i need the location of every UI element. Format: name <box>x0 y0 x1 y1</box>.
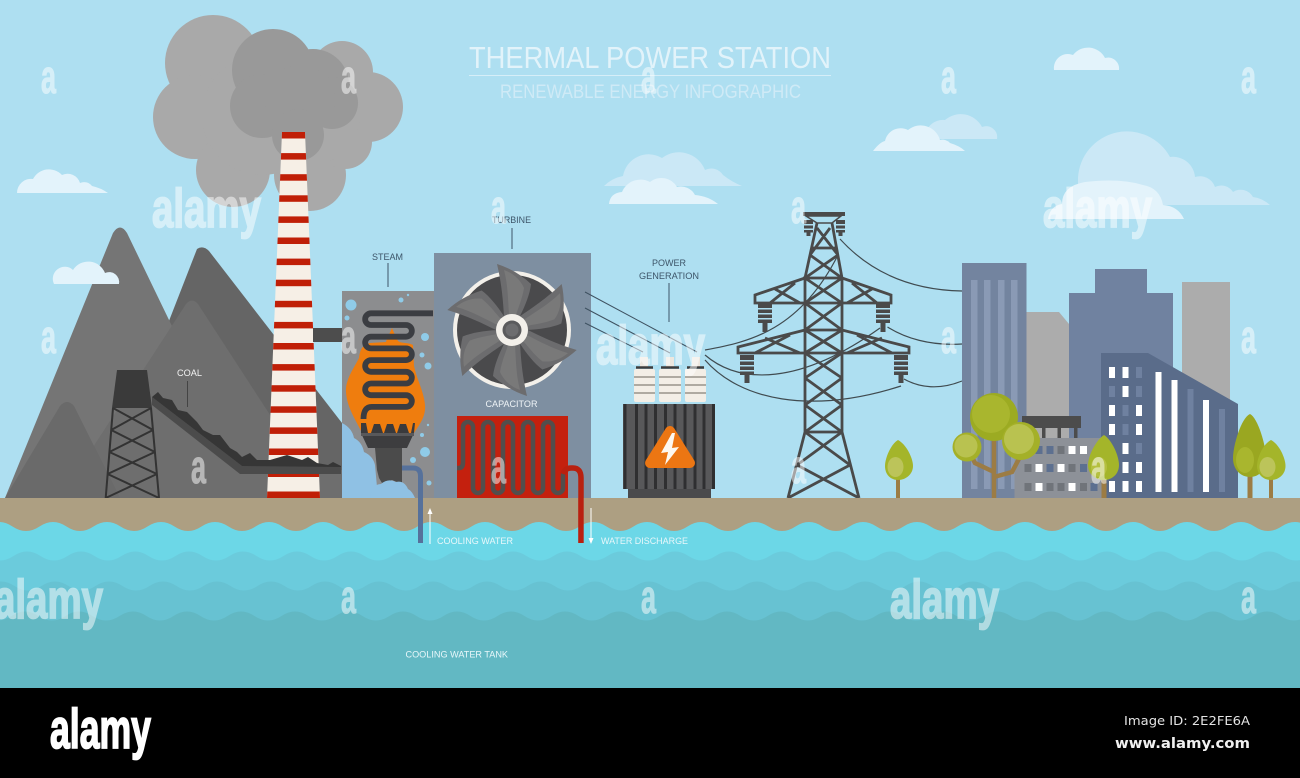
pylon <box>738 212 909 498</box>
watermarks: a <box>941 50 956 103</box>
watermarks: a <box>641 50 656 103</box>
warning triangle <box>650 431 690 465</box>
right tree pair <box>1233 414 1286 498</box>
footer bar <box>0 688 1300 778</box>
small low building <box>1014 416 1102 498</box>
water discharge arrow <box>588 508 594 544</box>
small cloud over mountain <box>53 262 119 284</box>
coal tower <box>106 370 159 498</box>
watermarks: alamy <box>1043 177 1152 239</box>
watermarks: a <box>1241 310 1256 363</box>
watermarks: alamy <box>152 177 261 239</box>
steam label <box>372 252 403 287</box>
title: RENEWABLE ENERGY INFOGRAPHIC <box>500 81 801 103</box>
capacitor label: CAPACITOR <box>486 399 538 410</box>
steam bubbles <box>344 294 432 486</box>
city buildings <box>962 263 1238 498</box>
wires from turbine to transformer <box>585 292 697 353</box>
ground <box>0 498 1300 531</box>
cooling water pipe <box>402 468 420 543</box>
watermarks: a <box>341 570 356 623</box>
watermarks <box>0 50 1256 630</box>
hot water pipe <box>563 468 581 543</box>
watermarks: a <box>941 310 956 363</box>
watermarks: a <box>341 50 356 103</box>
tall blue tower <box>962 263 1026 498</box>
water layer 4 <box>0 612 1300 688</box>
tree in front of buildings <box>1088 435 1119 498</box>
boiler building <box>342 291 434 498</box>
boiler coil <box>364 313 433 419</box>
footer logo: alamy <box>50 697 151 760</box>
blue stepped tower <box>1069 269 1173 498</box>
watermarks: a <box>791 440 806 493</box>
power generation label: GENERATION <box>639 271 699 282</box>
water discharge label: WATER DISCHARGE <box>601 536 688 547</box>
watermarks: a <box>191 440 206 493</box>
power generation label: POWER <box>652 258 686 269</box>
water layer 3 <box>0 582 1300 688</box>
small tree left <box>885 440 913 498</box>
watermarks: a <box>41 50 56 103</box>
watermarks: alamy <box>890 568 999 630</box>
watermarks: a <box>41 310 56 363</box>
fan hub <box>496 314 528 346</box>
watermarks: a <box>1241 50 1256 103</box>
water layer 2 <box>0 552 1300 688</box>
cooling water arrow <box>428 508 432 544</box>
chimney <box>267 132 320 498</box>
flame <box>346 328 425 433</box>
large round tree <box>952 393 1040 498</box>
cooling water label: COOLING WATER <box>437 536 513 547</box>
watermarks: a <box>1241 570 1256 623</box>
transformer <box>623 357 715 498</box>
transmission wires <box>705 239 962 401</box>
flue pipe <box>313 328 342 342</box>
website: www.alamy.com <box>1115 736 1250 752</box>
steam label: STEAM <box>372 252 403 263</box>
watermarks: a <box>341 310 356 363</box>
title <box>469 41 831 103</box>
watermarks: a <box>791 180 806 233</box>
turbine label <box>492 215 531 249</box>
grey tower far right <box>1182 282 1230 412</box>
turbine building <box>434 253 591 498</box>
water layer 1 <box>0 500 1300 688</box>
insulators <box>634 357 706 402</box>
power generation label <box>639 258 699 322</box>
pylon insulators <box>740 220 908 383</box>
clouds <box>17 48 1270 219</box>
dark blue office building <box>1101 353 1238 498</box>
fan blades <box>445 264 579 396</box>
smoke cloud <box>153 15 403 211</box>
watermarks: a <box>641 570 656 623</box>
burner <box>361 423 415 448</box>
mountains <box>5 228 342 498</box>
coal conveyor <box>152 392 341 474</box>
coal label: COAL <box>177 368 202 379</box>
capacitor <box>457 416 568 498</box>
watermarks: alamy <box>596 314 705 376</box>
title: THERMAL POWER STATION <box>469 41 831 75</box>
grey tower centre <box>1026 312 1069 498</box>
cooling water tank label: COOLING WATER TANK <box>406 650 509 660</box>
watermarks: a <box>491 180 506 233</box>
steam cloud front <box>370 480 415 498</box>
turbine fan <box>445 264 579 396</box>
steam cloud back <box>342 423 378 498</box>
turbine label: TURBINE <box>492 215 531 226</box>
pipes into water <box>418 498 584 543</box>
image id: Image ID: 2E2FE6A <box>1124 714 1251 728</box>
watermarks: a <box>491 440 506 493</box>
coal label <box>177 368 202 407</box>
burner stem <box>375 448 402 484</box>
watermarks: a <box>1091 440 1106 493</box>
